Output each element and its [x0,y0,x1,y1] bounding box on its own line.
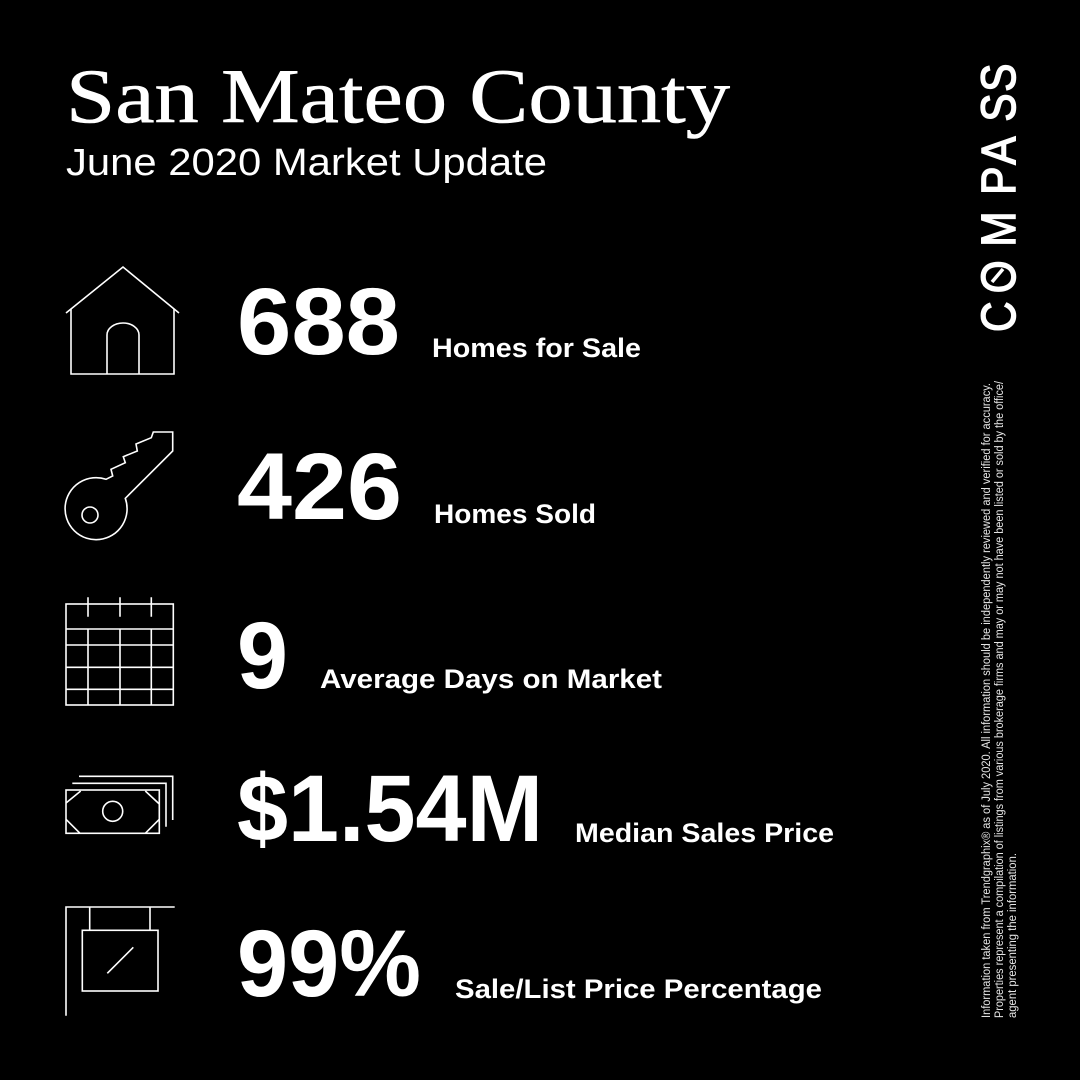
disclaimer: Properties represent a compilation of listings from various brokerage firms and may or may not have been listed or sold by the office/ [994,380,1006,1018]
icon: hanging sign [66,907,175,1016]
stat: average days on market [237,603,662,709]
title: San Mateo County [66,53,731,139]
stat: median sales price [237,756,834,862]
icon: key [65,432,173,540]
stat: average days on market: Average Days on Market [320,664,662,694]
stat: sale to list price percentage: 99% [237,911,421,1017]
icon: stack of money [66,776,173,833]
stat: sale to list price percentage: Sale/List Price Percentage [455,974,822,1004]
disclaimer: agent presenting the information. [1007,853,1019,1018]
stat: homes sold: Homes Sold [434,499,596,529]
disclaimer [981,380,1019,1018]
icon: calendar [66,597,173,705]
stat: homes sold [237,434,596,540]
stat: homes sold: 426 [237,434,402,540]
stat: median sales price: $1.54M [237,756,543,862]
stat: sale to list price percentage [237,911,822,1017]
subtitle: June 2020 Market Update [66,142,547,184]
stat: homes for sale: Homes for Sale [432,333,641,363]
stat: median sales price: Median Sales Price [575,818,834,848]
icon: house [66,267,179,374]
disclaimer: Information taken from Trendgraphix® as of July 2020. All information should be independently reviewed and verified for accuracy. [981,383,993,1018]
stat: homes for sale: 688 [237,269,400,375]
stat: homes for sale [237,269,641,375]
stat: average days on market: 9 [237,603,288,709]
logo: compass: COMPASS [971,64,1026,332]
